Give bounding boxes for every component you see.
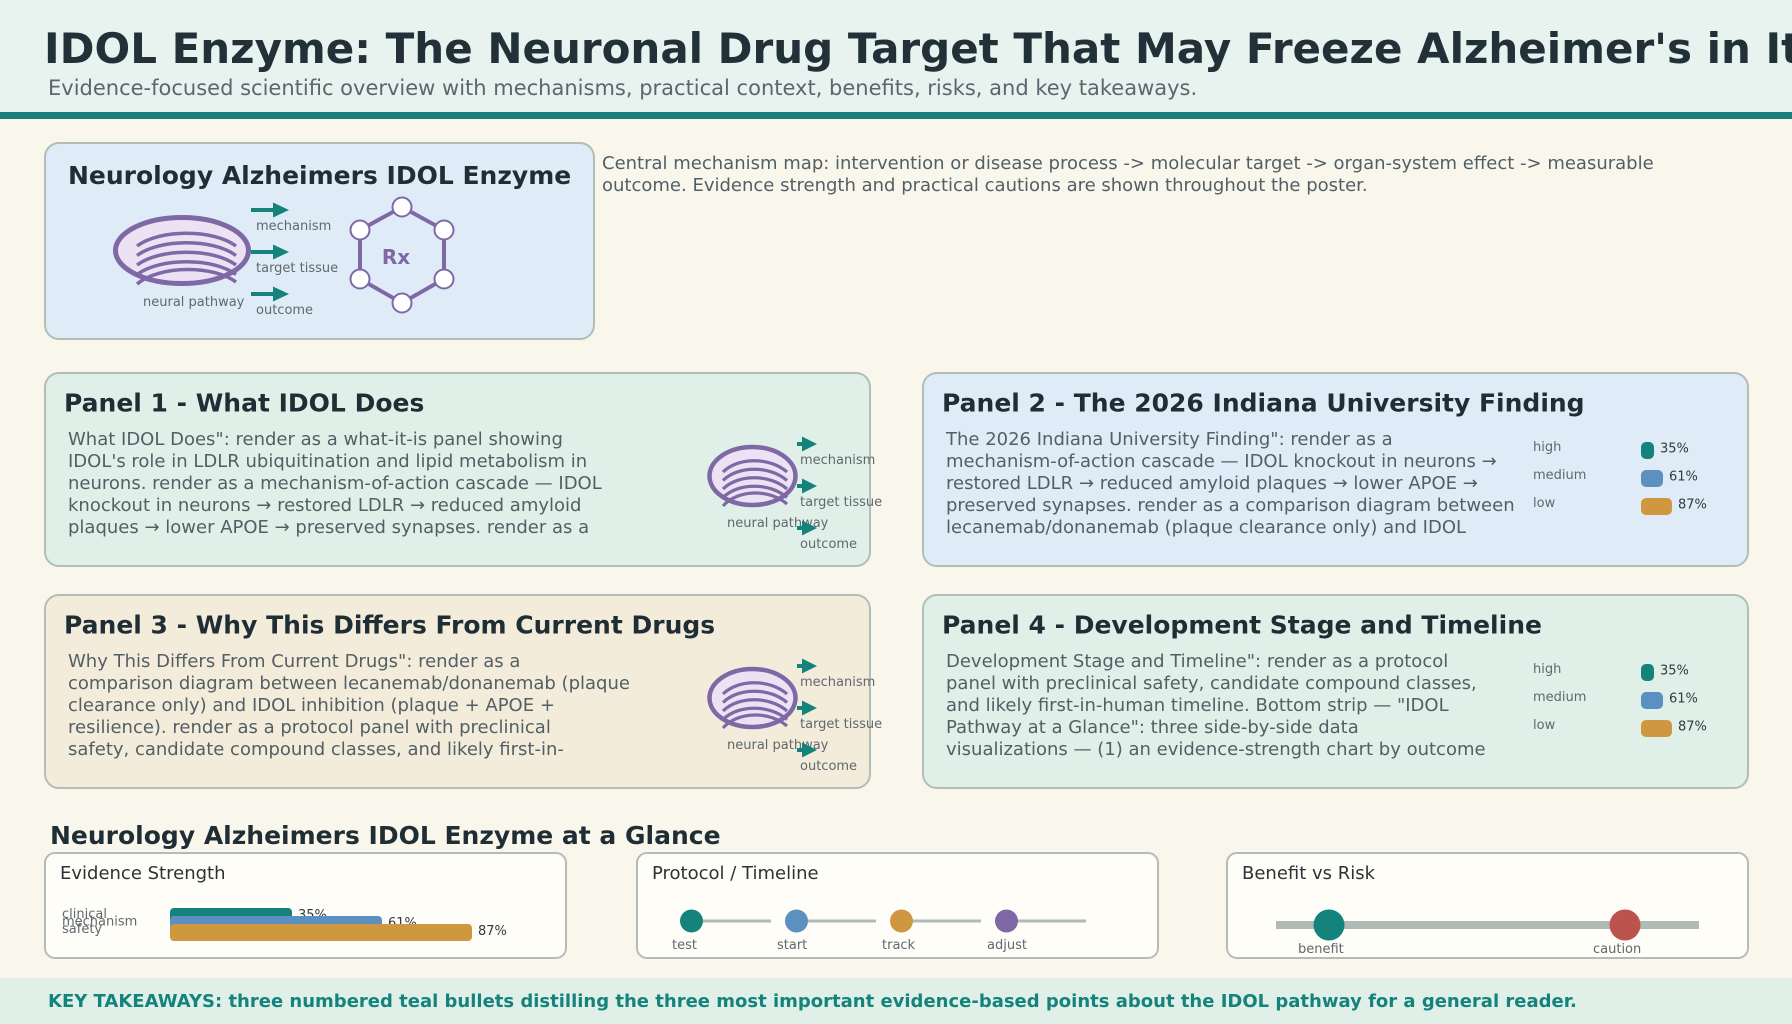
- panel 4 body: panel with preclinical safety, candidate compound classes,: [946, 673, 1477, 694]
- card: benefit vs risk: Benefit vs Risk: [1242, 863, 1376, 884]
- panel 4 heading: Panel 4 - Development Stage and Timeline: [942, 610, 1542, 640]
- panel 1 icon: neural pathway: mechanism: [800, 453, 875, 468]
- panel 1 icon: neural pathway: neural pathway: [727, 516, 829, 531]
- text block: central mechanism description: outcome. Evidence strength and practical cautions are shown throughout the poster.: [602, 175, 1368, 196]
- card: protocol timeline: [637, 853, 1158, 958]
- panel 2 body: preserved synapses. render as a comparison diagram between: [946, 495, 1515, 516]
- panel 4 bar chart: 87%: [1678, 720, 1707, 734]
- panel 4 bar chart: high: [1533, 662, 1561, 677]
- header band: [0, 0, 1792, 119]
- panel 4 body: Development Stage and Timeline": render as a protocol: [946, 651, 1448, 672]
- panel 1 icon: neural pathway: outcome: [800, 537, 857, 552]
- panel 2 bar chart: 61%: [1669, 470, 1698, 484]
- arrows: mechanism, target tissue, outcome: mechanism: [256, 219, 331, 234]
- panel 2 body: lecanemab/donanemab (plaque clearance only) and IDOL: [946, 517, 1466, 538]
- panel 4 body: Pathway at a Glance": three side-by-side data: [946, 717, 1359, 738]
- icon: neural pathway: neural pathway: [143, 295, 245, 310]
- panel 3 body: comparison diagram between lecanemab/donanemab (plaque: [68, 673, 630, 694]
- panel 2 bar chart: medium: [1533, 468, 1586, 483]
- subtitle: Evidence-focused scientific overview with mechanisms, practical context, benefits, risks, and key takeaways.: [48, 76, 1197, 100]
- arrows: mechanism, target tissue, outcome: outcome: [256, 303, 313, 318]
- panel 3 heading: Panel 3 - Why This Differs From Current Drugs: [64, 610, 715, 640]
- panel 4: Development Stage and Timeline: [923, 595, 1748, 788]
- card: evidence strength chart: 35%: [298, 908, 327, 923]
- key takeaways strip: KEY TAKEAWAYS: three numbered teal bullets distilling the three most important evidence-based points about the IDOL pathway for a general reader.: [48, 991, 1577, 1012]
- panel 2 bar chart: low: [1533, 496, 1556, 511]
- panel 3 icon: neural pathway: [710, 658, 882, 774]
- key takeaways strip: [0, 978, 1792, 1024]
- card: benefit vs risk: [1227, 853, 1748, 958]
- panel 1 body: neurons. render as a mechanism-of-action cascade — IDOL: [68, 473, 602, 494]
- card: evidence strength chart: safety: [62, 922, 102, 937]
- panel 2 body: mechanism-of-action cascade — IDOL knockout in neurons →: [946, 451, 1497, 472]
- panel 1 heading: Panel 1 - What IDOL Does: [64, 388, 424, 418]
- panel: central mechanism map: [45, 143, 594, 339]
- panel 2 bar chart: 35%: [1660, 442, 1689, 456]
- panel 2 bar chart: high: [1533, 440, 1561, 455]
- panel 4 body: and likely first-in-human timeline. Bottom strip — "IDOL: [946, 695, 1449, 716]
- panel 3 icon: neural pathway: mechanism: [800, 675, 875, 690]
- heading: central panel: Neurology Alzheimers IDOL Enzyme: [68, 161, 571, 190]
- card: protocol timeline: start: [777, 938, 807, 953]
- panel 3 body: safety, candidate compound classes, and likely first-in-: [68, 739, 564, 760]
- panel 1 body: knockout in neurons → restored LDLR → reduced amyloid: [68, 495, 581, 516]
- panel 3 body: clearance only) and IDOL inhibition (plaque + APOE +: [68, 695, 555, 716]
- arrows: mechanism, target tissue, outcome: [251, 202, 338, 318]
- panel 4 bar chart: [1533, 662, 1707, 737]
- icon: neural pathway: [116, 218, 248, 310]
- panel 3 body: resilience). render as a protocol panel with preclinical: [68, 717, 551, 738]
- card: evidence strength chart: clinical: [62, 907, 107, 922]
- card: protocol timeline: track: [882, 938, 916, 953]
- panel 3 icon: neural pathway: outcome: [800, 759, 857, 774]
- panel 1 icon: neural pathway: target tissue: [800, 495, 882, 510]
- icon: Rx molecule hexagon: Rx: [382, 245, 410, 269]
- panel 3: Why This Differs From Current Drugs: [45, 595, 882, 788]
- card: protocol timeline: test: [672, 938, 697, 953]
- card: evidence strength chart: 61%: [388, 916, 417, 931]
- panel 1 body: What IDOL Does": render as a what-it-is panel showing: [68, 429, 563, 450]
- panel 1 body: IDOL's role in LDLR ubiquitination and lipid metabolism in: [68, 451, 587, 472]
- card: evidence strength chart: Evidence Strength: [60, 863, 226, 884]
- card: benefit vs risk: caution: [1593, 942, 1641, 957]
- panel 1 body: plaques → lower APOE → preserved synapses. render as a: [68, 517, 589, 538]
- panel 3 icon: neural pathway: neural pathway: [727, 738, 829, 753]
- panel 1 icon: neural pathway: [710, 436, 882, 552]
- panel 4 bar chart: 61%: [1669, 692, 1698, 706]
- card: protocol timeline: adjust: [987, 938, 1027, 953]
- panel 3 icon: neural pathway: target tissue: [800, 717, 882, 732]
- panel 3 body: Why This Differs From Current Drugs": render as a: [68, 651, 520, 672]
- panel 2 body: The 2026 Indiana University Finding": render as a: [946, 429, 1393, 450]
- heading: at a glance: Neurology Alzheimers IDOL Enzyme at a Glance: [50, 821, 721, 850]
- panel 4 bar chart: medium: [1533, 690, 1586, 705]
- card: protocol timeline: Protocol / Timeline: [652, 863, 819, 884]
- card: evidence strength chart: 87%: [478, 924, 507, 939]
- arrows: mechanism, target tissue, outcome: target tissue: [256, 261, 338, 276]
- card: evidence strength chart: [45, 853, 566, 958]
- panel 4 body: visualizations — (1) an evidence-strength chart by outcome: [946, 739, 1486, 760]
- panel 1: What IDOL Does: [45, 373, 882, 566]
- panel 2 heading: Panel 2 - The 2026 Indiana University Finding: [942, 388, 1585, 418]
- card: benefit vs risk: benefit: [1298, 942, 1344, 957]
- icon: Rx molecule hexagon: [350, 198, 454, 312]
- panel 4 bar chart: 35%: [1660, 664, 1689, 678]
- panel 2 body: restored LDLR → reduced amyloid plaques → lower APOE →: [946, 473, 1478, 494]
- panel 2: The 2026 Indiana University Finding: [923, 373, 1748, 566]
- text block: central mechanism description: Central mechanism map: intervention or disease process -> molecular target -> organ-system effect -> measurable: [602, 153, 1654, 174]
- panel 4 bar chart: low: [1533, 718, 1556, 733]
- panel 2 bar chart: [1533, 440, 1707, 515]
- panel 2 bar chart: 87%: [1678, 498, 1707, 512]
- card: evidence strength chart: mechanism: [62, 914, 137, 930]
